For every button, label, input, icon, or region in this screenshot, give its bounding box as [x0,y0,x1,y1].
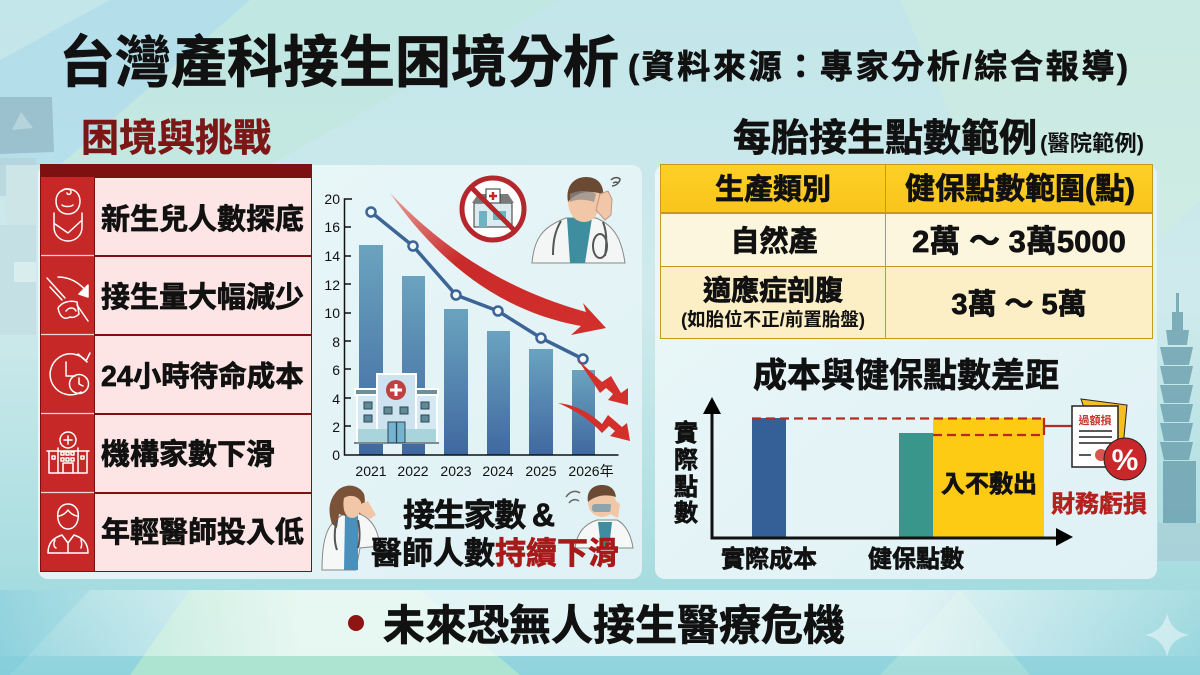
y axis labels: 2 [332,419,340,435]
table row: caesarean: 3萬 ～ 5萬 [951,288,1087,321]
icon: no clinic [462,178,524,240]
dashed gap lines [752,418,1044,435]
y axis labels: 16 [324,219,340,235]
points table [660,164,1153,339]
table row: natural: 2萬 ～ 3萬5000 [912,224,1126,259]
y axis labels: 20 [324,191,340,207]
line series [366,208,588,364]
y axis labels: 10 [324,305,340,321]
x axis labels: 2025 [525,463,557,479]
text: 接生量大幅減少 [101,281,304,314]
icon: clock [50,353,90,395]
bar and line chart [324,191,630,479]
shortfall label: 入不敷出 [941,470,1037,498]
icon: hospital [47,432,89,473]
axes [344,199,618,455]
y label: 數 [674,500,698,527]
y label: 點 [674,474,698,501]
footer banner: 未來恐無人接生醫療危機 [383,602,845,649]
heading: points example: 每胎接生點數範例 [733,118,1037,160]
y axis labels: 8 [332,334,340,350]
x axis labels: 2026年 [568,463,614,479]
hospital details [354,380,439,443]
x axis labels: 2023 [440,463,472,479]
bar: shortfall [933,418,1044,537]
y axis labels: 4 [332,391,340,407]
x axis labels: 2024 [482,463,514,479]
text: 機構家數下滑 [101,438,275,471]
y label: 實 [674,420,698,447]
Taipei 101 backdrop [1158,293,1200,561]
chart callout text: 接生家數 & [403,497,555,533]
cost gap chart [674,397,1147,573]
icon: loss report [1072,399,1146,480]
table header [661,165,1152,212]
y label: 際 [674,447,698,474]
y axis labels: 6 [332,362,340,378]
panel: challenges list [40,164,312,572]
heading: cost gap: 成本與健保點數差距 [753,357,1059,395]
ultrasound machine backdrop [0,97,54,335]
icon: sparkle [1145,613,1189,657]
title: (資料來源：專家分析/綜合報導) [628,48,1128,85]
bars [359,245,595,455]
y axis labels: 12 [324,277,340,293]
y axis labels: 14 [324,248,340,264]
chart callout text [371,497,619,571]
illustration: young male doctor [566,485,633,548]
cost gap chart: 健保點數 [868,546,964,573]
icon: loss report: % [1112,444,1138,477]
x labels: 實際成本 [721,546,817,573]
table header: 健保點數範圍(點) [905,173,1135,206]
icon: loss report: 過額損 [1078,413,1112,427]
icon: falling births [47,277,88,321]
icon: hospital building [355,374,438,443]
chart callout text: 醫師人數持續下滑 [371,536,619,571]
axes [703,397,1073,546]
x axis labels: 2022 [397,463,429,479]
table row: caesarean: 適應症剖腹 [703,274,843,306]
panel: right [655,165,1157,579]
label: financial loss: 財務虧損 [1051,491,1147,518]
panel: left [38,165,642,579]
table row: caesarean [661,267,1152,338]
table row: caesarean: (如胎位不正/前置胎盤) [681,309,865,330]
text: 年輕醫師投入低 [101,516,304,549]
bar: actual cost [752,418,786,537]
arrow: large decline [390,193,606,335]
illustration: tired doctor top [532,177,625,263]
bar: insurance points [899,433,933,537]
heading: points example: (醫院範例) [1040,130,1144,156]
x axis labels: 2021 [355,463,387,479]
y label [674,420,698,527]
illustration: female doctor [322,486,380,570]
title [59,31,1128,94]
y axis labels: 0 [332,447,340,463]
title: 台灣產科接生困境分析 [59,31,619,94]
arrow: zigzag lower [558,403,630,441]
text: 新生兒人數探底 [101,203,304,236]
x axis labels [355,463,614,479]
icon: young doctor [48,504,88,553]
table row: natural [661,214,1152,266]
y axis labels [324,191,340,463]
heading: difficulties: 困境與挑戰 [81,118,271,160]
table row: natural: 自然產 [730,225,818,258]
table header: 生產類別 [715,173,831,206]
text: 24小時待命成本 [101,360,304,393]
arrow: zigzag upper [578,360,628,405]
footer banner [0,590,1200,656]
icon: newborn [54,189,82,241]
